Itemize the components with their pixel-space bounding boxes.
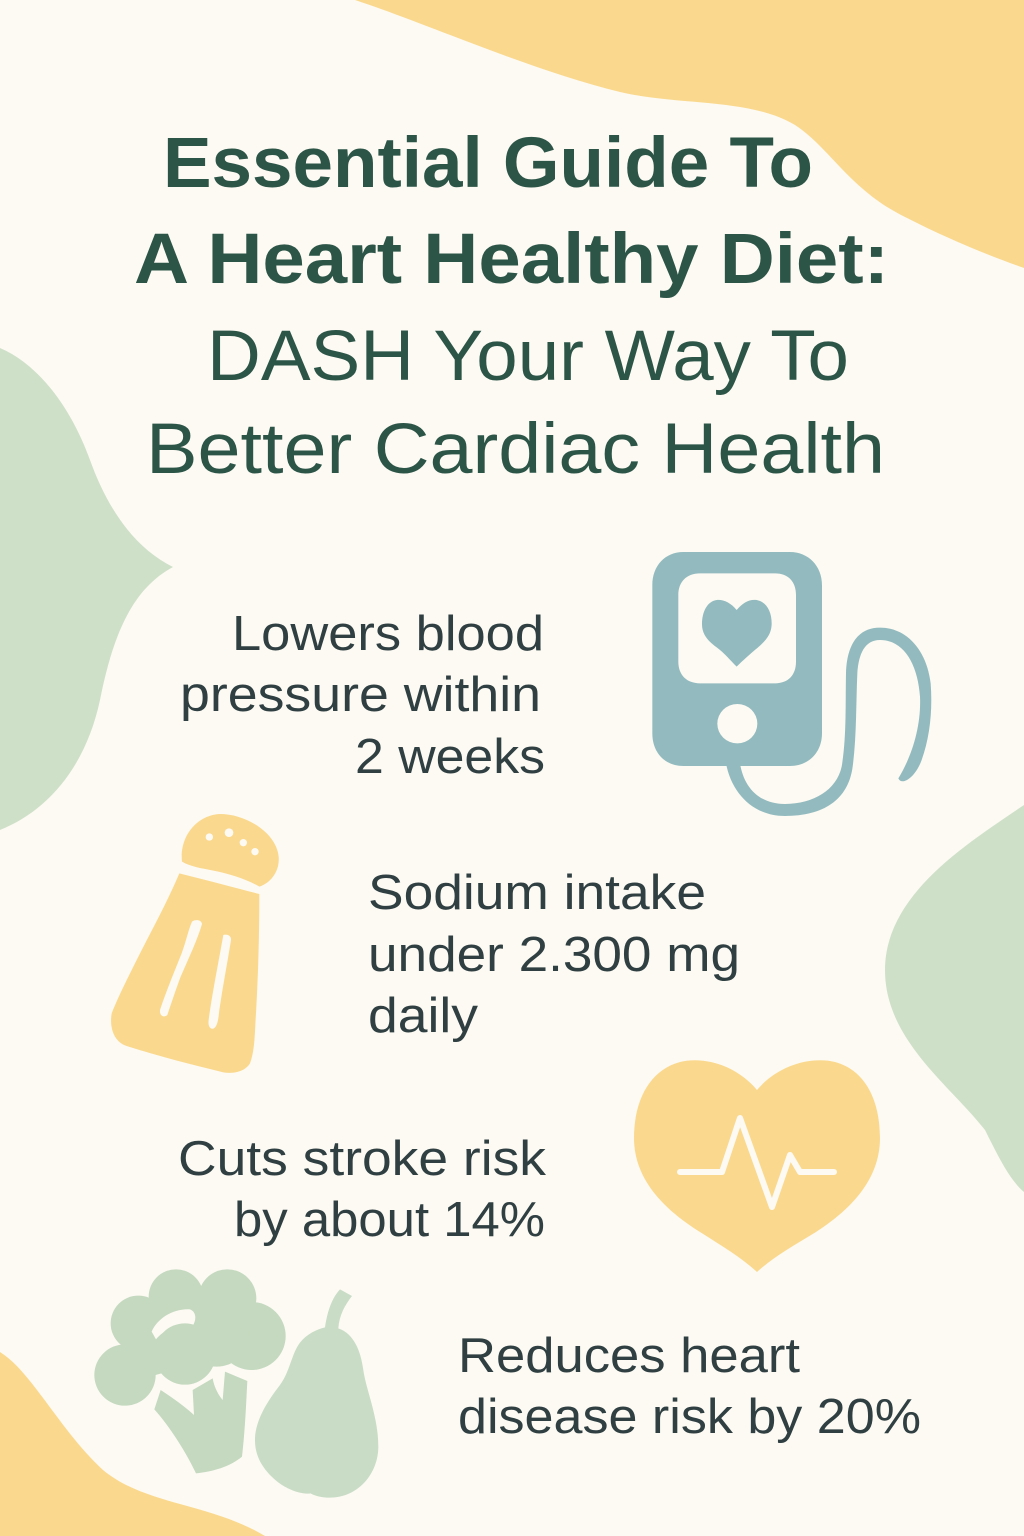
blob: bottom left yellow	[0, 1352, 265, 1536]
text: blood pressure: 2 weeks	[355, 730, 545, 784]
text: stroke risk	[178, 1132, 547, 1247]
icon: heart with pulse	[634, 1060, 880, 1272]
icon: salt shaker	[111, 814, 279, 1073]
icon: broccoli and pear	[94, 1269, 378, 1498]
text: sodium intake: Sodium intake	[368, 866, 706, 920]
text: blood pressure	[180, 607, 545, 784]
icon: broccoli	[94, 1269, 286, 1473]
title: Essential Guide To	[163, 124, 813, 203]
text: blood pressure: Lowers blood	[232, 607, 544, 661]
blob: top right yellow	[355, 0, 1024, 268]
text: stroke risk: by about 14%	[234, 1193, 545, 1247]
text: sodium intake: daily	[368, 989, 479, 1043]
text: blood pressure: pressure within	[180, 668, 541, 722]
text: sodium intake	[368, 866, 740, 1043]
text: stroke risk: Cuts stroke risk	[178, 1132, 547, 1186]
text: heart disease risk: disease risk by 20%	[458, 1390, 921, 1444]
title: Better Cardiac Health	[146, 410, 885, 489]
blob: right green	[885, 805, 1024, 1192]
blob: left green	[0, 348, 173, 830]
icon: pear	[255, 1289, 378, 1498]
title: DASH Your Way To	[207, 317, 849, 396]
title	[134, 124, 889, 489]
text: heart disease risk	[458, 1329, 921, 1444]
text: sodium intake: under 2.300 mg	[368, 928, 740, 982]
icon: blood pressure monitor	[652, 552, 931, 816]
title: A Heart Healthy Diet:	[134, 220, 889, 299]
text: heart disease risk: Reduces heart	[458, 1329, 800, 1383]
